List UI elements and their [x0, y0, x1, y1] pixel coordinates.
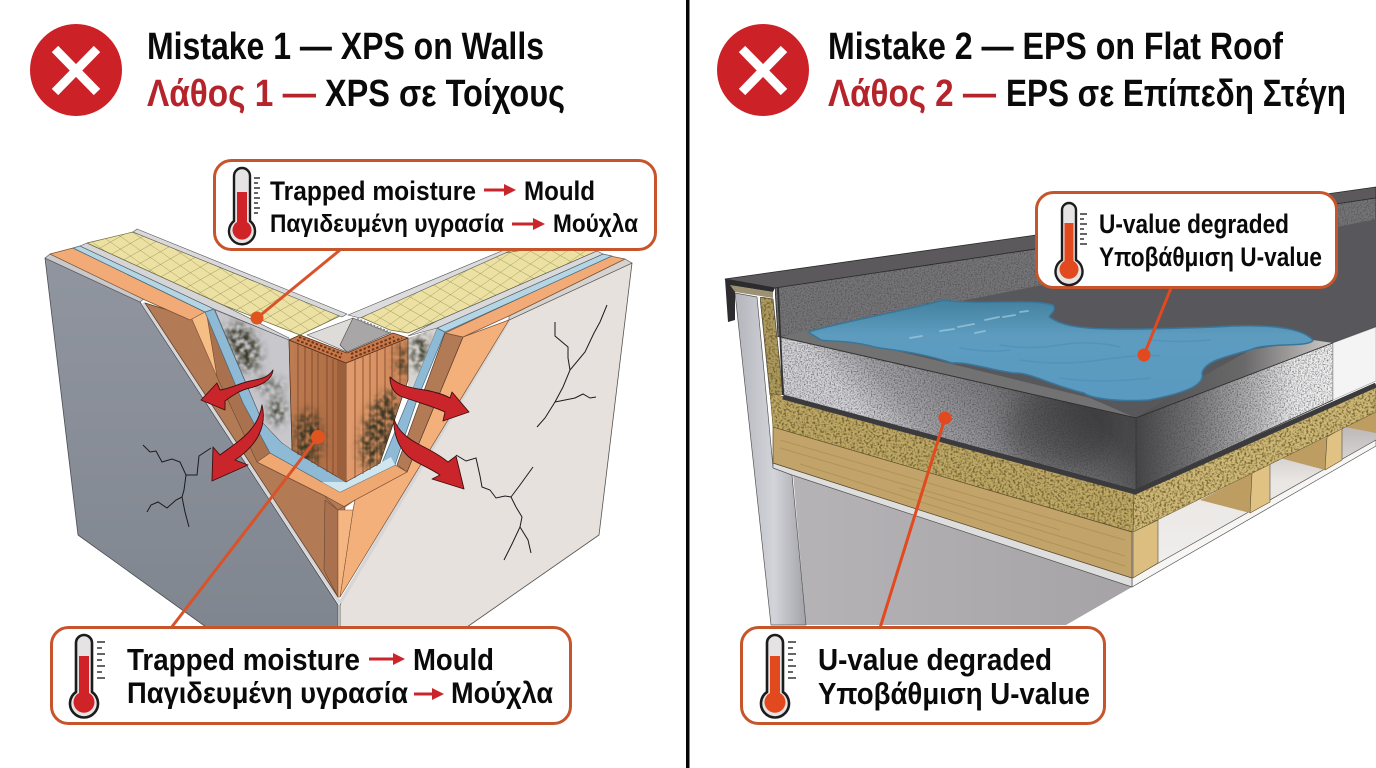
heading: mistake 2: Λάθος 2 —	[828, 73, 996, 115]
leader line to column	[171, 430, 325, 628]
OSB deck front	[770, 393, 1134, 532]
callout text	[1099, 209, 1322, 272]
icon: thermometer	[229, 168, 260, 244]
heading: mistake 1: Λάθος 1 —	[147, 73, 316, 115]
water pool	[808, 300, 1313, 401]
EPS panel side	[1136, 343, 1333, 490]
mould on inner wall	[218, 317, 285, 425]
callout text: Υποβάθμιση U-value	[1099, 242, 1322, 272]
arrow 4	[394, 419, 464, 489]
inner reveal left	[206, 310, 270, 462]
upstand	[775, 198, 1376, 337]
roof membrane	[778, 219, 1376, 420]
callout text: Υποβάθμιση U-value	[818, 676, 1090, 711]
callout text: Trapped moisture	[270, 176, 476, 206]
leader line to inner wall	[250, 250, 340, 324]
leader line to water	[1138, 288, 1171, 362]
top strips left wall	[50, 248, 205, 320]
OSB vertical	[760, 297, 783, 395]
panel: Mistake 2 EPS on flat roof	[717, 24, 1376, 724]
callout: U-value lower	[742, 628, 1104, 724]
brick column	[289, 340, 346, 482]
callout text	[818, 642, 1090, 711]
arrow 2	[212, 405, 263, 481]
callout text: Μούχλα	[553, 210, 639, 238]
vapour layer, blue	[205, 309, 445, 492]
mould on column	[294, 344, 409, 473]
callout: trapped moisture lower	[52, 628, 570, 724]
left insulation face	[145, 303, 345, 597]
brick top	[289, 333, 408, 363]
callout text	[270, 176, 639, 238]
panel divider	[686, 0, 690, 768]
water stain	[1005, 390, 1115, 470]
illustration: flat roof cross-section	[725, 187, 1376, 625]
callout text: U-value degraded	[818, 642, 1052, 677]
top capping	[725, 187, 1376, 288]
leader line to EPS	[880, 412, 952, 628]
soffit board edge	[1132, 440, 1376, 587]
illustration: wall corner cross-section	[45, 229, 632, 627]
fascia flashing	[725, 279, 775, 322]
left render face	[45, 258, 338, 627]
joist sides and ends	[1200, 473, 1252, 513]
icon: thermometer	[761, 635, 796, 717]
icon: thermometer	[70, 635, 105, 717]
heading: mistake 1: Mistake 1 — XPS on Walls	[147, 26, 544, 68]
mouldy inner wall	[215, 310, 292, 450]
callout: trapped moisture upper	[214, 160, 656, 250]
EPS panel front	[780, 337, 1136, 490]
OSB deck side	[1133, 385, 1376, 532]
membrane under EPS	[783, 385, 1376, 492]
icon: thermometer	[1056, 203, 1087, 285]
exterior wall	[735, 293, 806, 625]
timber layer	[773, 427, 1132, 578]
heading: mistake 1: XPS σε Τοίχους	[325, 73, 565, 115]
callout text	[127, 642, 553, 710]
heading: mistake 2	[828, 26, 1346, 115]
top strips right wall	[445, 256, 625, 337]
top surface of EPS	[1136, 340, 1333, 418]
water highlights	[910, 311, 1210, 381]
callout: U-value upper	[1036, 192, 1336, 288]
callout text: Mould	[524, 176, 595, 206]
render edge strips	[143, 303, 509, 603]
right insulation face	[340, 320, 509, 597]
right plaster face	[340, 263, 632, 627]
soffit shadow	[793, 473, 1132, 625]
cracks	[143, 305, 607, 560]
void between joists	[1132, 395, 1376, 587]
mould right strip	[411, 332, 429, 372]
callout text: Mould	[413, 642, 494, 677]
callout text: Trapped moisture	[127, 642, 360, 677]
heading: mistake 2: Mistake 2 — EPS on Flat Roof	[828, 26, 1283, 68]
callout text: Παγιδευμένη υγρασία	[270, 210, 505, 238]
soffit board	[773, 463, 1132, 587]
arrow 3	[390, 377, 469, 421]
icon: red cross circle 1	[30, 24, 122, 116]
callout text: Παγιδευμένη υγρασία	[127, 677, 409, 710]
callout text: Μούχλα	[451, 677, 553, 710]
heading: mistake 1	[147, 26, 565, 115]
moisture arrows	[201, 370, 469, 489]
arrow 1	[201, 370, 273, 410]
callout text: U-value degraded	[1099, 209, 1289, 239]
corner frame	[257, 453, 407, 507]
hollow of column	[307, 318, 353, 352]
icon: red cross circle 2	[717, 24, 809, 116]
panel: Mistake 1 XPS on walls	[30, 24, 656, 724]
